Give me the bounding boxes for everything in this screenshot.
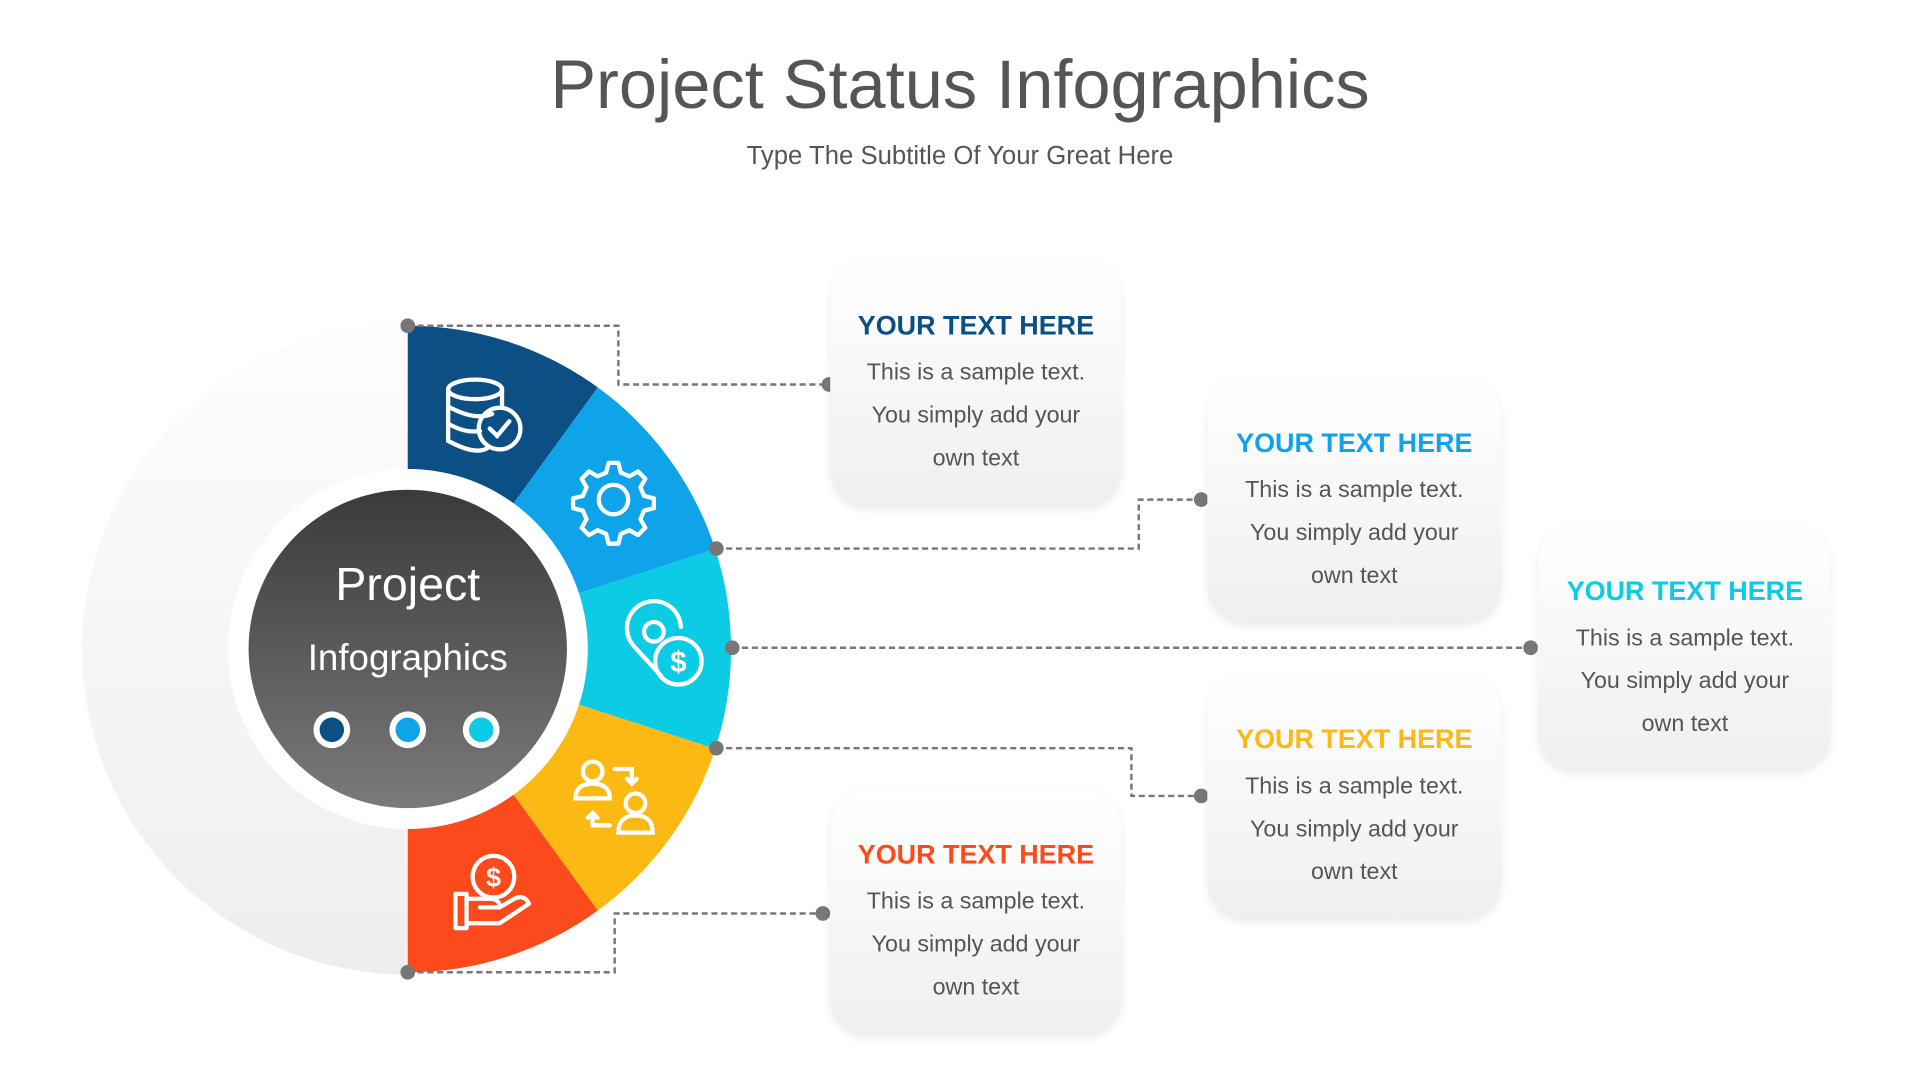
icon: location dollar: $ — [670, 646, 687, 679]
card 5: This is a sample text. — [867, 888, 1085, 914]
card 4: You simply add your — [1250, 815, 1459, 841]
center circle — [228, 469, 588, 829]
card 1: This is a sample text. — [867, 359, 1085, 385]
title: Project Status Infographics — [550, 46, 1370, 123]
connector dots — [400, 318, 1538, 980]
card 4: This is a sample text. — [1245, 772, 1463, 798]
card 3: own text — [1642, 710, 1729, 736]
card 3 — [1538, 527, 1831, 771]
card 1: YOUR TEXT HERE — [858, 310, 1094, 340]
background half circle — [82, 323, 408, 975]
icon: database check — [448, 380, 520, 451]
card 2: You simply add your — [1250, 519, 1459, 545]
card 4: YOUR TEXT HERE — [1236, 724, 1472, 754]
card 1: own text — [933, 444, 1020, 470]
card 4: own text — [1311, 858, 1398, 884]
segment 4 yellow — [514, 705, 715, 911]
card 2: own text — [1311, 562, 1398, 588]
icon: hand coin — [456, 856, 529, 928]
subtitle: Type The Subtitle Of Your Great Here — [747, 142, 1173, 170]
segment 1 dark blue — [408, 326, 598, 503]
card 5: You simply add your — [872, 930, 1080, 956]
icon: gear — [573, 463, 654, 544]
card 1: You simply add your — [872, 401, 1080, 427]
ring segments — [408, 326, 731, 972]
card 1 — [830, 261, 1122, 507]
card 2: YOUR TEXT HERE — [1236, 428, 1472, 458]
card 2: This is a sample text. — [1245, 476, 1463, 502]
card 2 — [1207, 378, 1501, 623]
segment 5 red — [408, 795, 598, 972]
card 3: This is a sample text. — [1576, 624, 1794, 650]
connectors — [408, 326, 1531, 972]
card 5 — [830, 791, 1122, 1036]
icon: location dollar — [627, 601, 702, 684]
segment 2 blue — [514, 387, 715, 593]
card 3: You simply add your — [1581, 667, 1789, 693]
card 3: YOUR TEXT HERE — [1567, 576, 1803, 606]
card 4 — [1207, 675, 1501, 920]
center circle: Project — [335, 558, 480, 610]
segment 3 cyan — [579, 549, 731, 749]
card 5: own text — [933, 973, 1020, 999]
card 5: YOUR TEXT HERE — [858, 839, 1094, 869]
icon: hand coin: $ — [486, 863, 501, 893]
center circle: Infographics — [308, 637, 508, 678]
icon: people exchange — [576, 762, 653, 833]
